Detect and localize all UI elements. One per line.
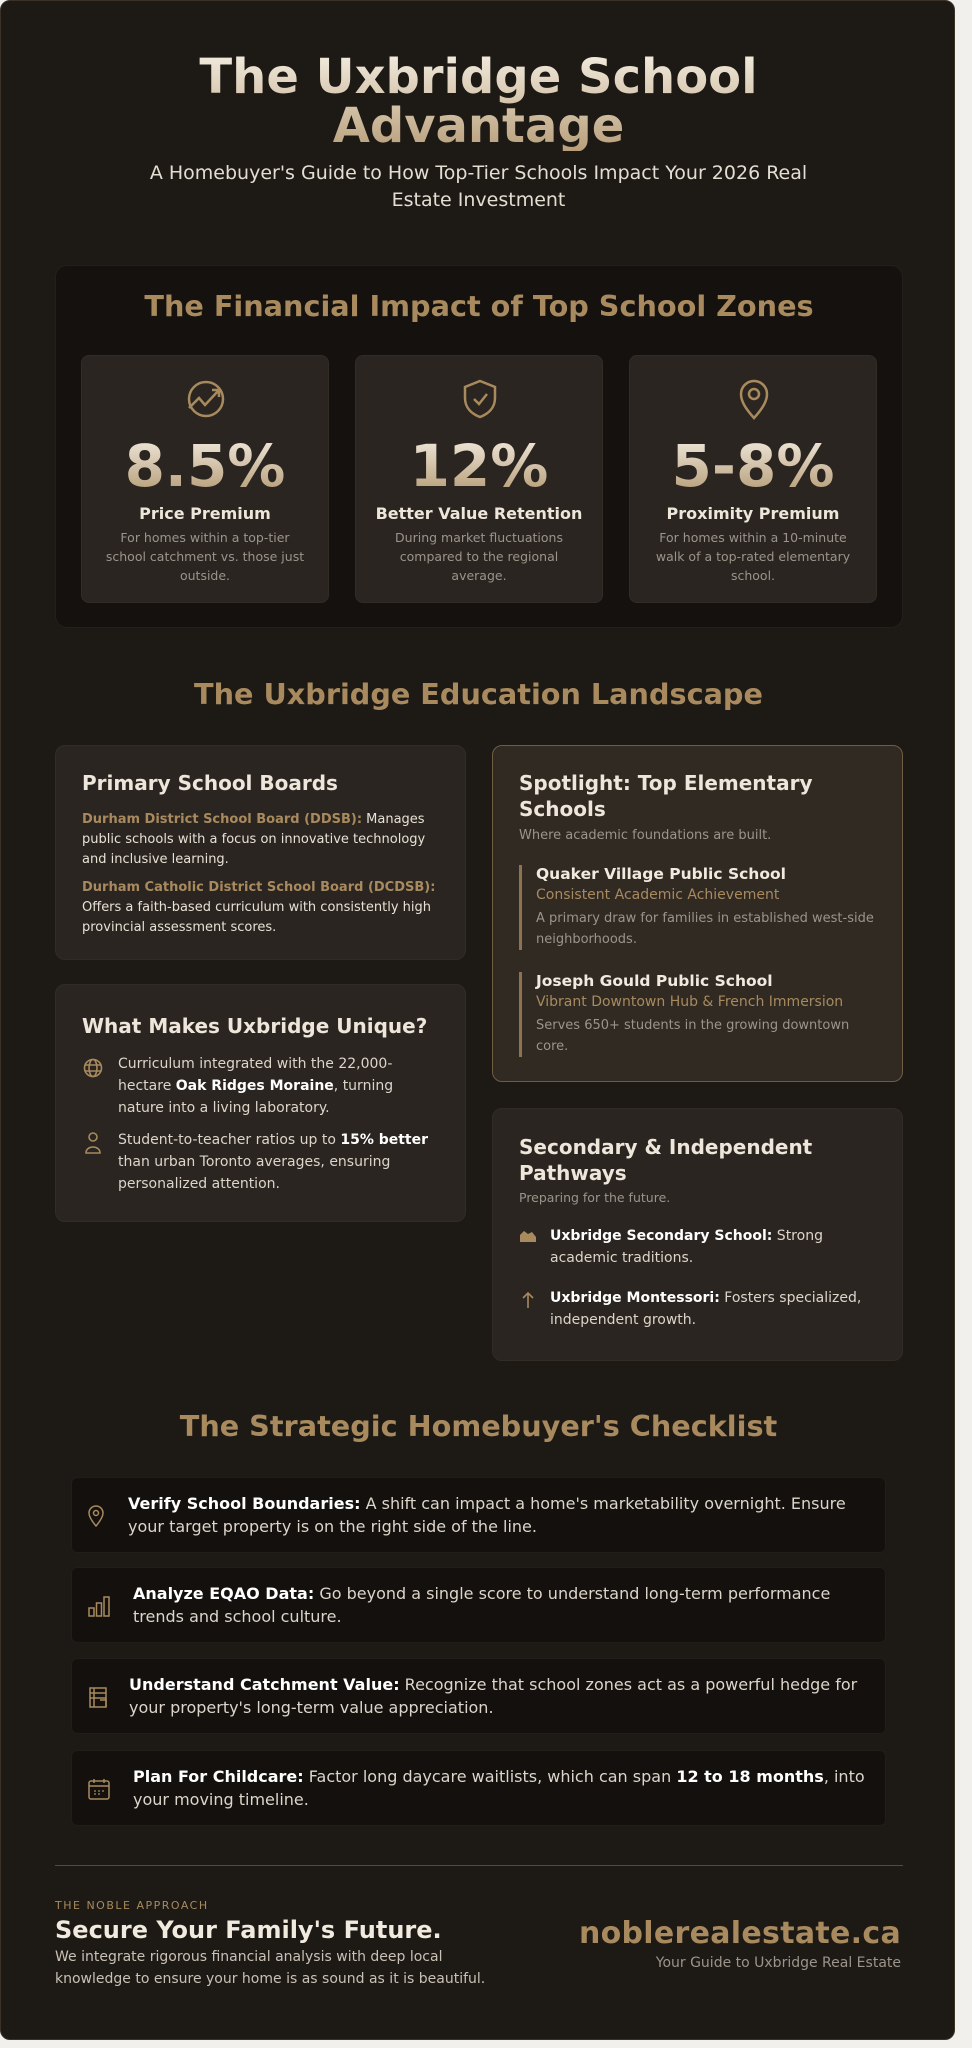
- icon: map pin: [740, 380, 768, 420]
- footer: left: THE NOBLE APPROACH: [55, 1899, 209, 1912]
- icon: trend circle: [188, 380, 224, 418]
- checklist item: boundaries: Verify School Boundaries: A shift can impact a home's marketability overnight. Ensure your target property is on the right side of the line.: [128, 1494, 846, 1536]
- footer: left: [54, 1899, 485, 1987]
- stat card: value retention: [355, 355, 603, 603]
- panel: spotlight elementary: [492, 745, 903, 1082]
- subtitle: Estate Investment: [392, 189, 565, 211]
- checklist item: EQAO: [71, 1567, 886, 1643]
- panel: spotlight elementary: Spotlight: Top Elementary Schools: [519, 771, 812, 821]
- heading: financial impact: The Financial Impact of Top School Zones: [144, 289, 814, 323]
- text: boards: Durham District School Board (DDSB): Manages public schools with a focus on innovative technology and inclusive learning.: [82, 812, 425, 867]
- school: joseph gould: Serves 650+ students in the growing downtown core.: [536, 1018, 849, 1054]
- panel: secondary pathways: [492, 1108, 903, 1361]
- item: montessori: Uxbridge Montessori: Fosters specialized, independent growth.: [550, 1290, 861, 1328]
- checklist item: catchment: [71, 1658, 886, 1734]
- stat card: price premium: For homes within a top-tier school catchment vs. those just outside.: [106, 530, 304, 583]
- school: joseph gould: Joseph Gould Public School: [536, 972, 773, 990]
- footer: brand: [579, 1916, 901, 1971]
- heading: education landscape: The Uxbridge Education Landscape: [194, 677, 763, 711]
- subtitle: [150, 162, 807, 211]
- checklist item: catchment: Understand Catchment Value: Recognize that school zones act as a powerful hedge for your property's long-term value appreciation.: [129, 1675, 857, 1717]
- stat card: proximity: For homes within a 10-minute walk of a top-rated elementary school.: [656, 530, 850, 583]
- checklist item: childcare: [71, 1750, 886, 1826]
- title: [1, 53, 956, 151]
- school: joseph gould: Vibrant Downtown Hub & French Immersion: [536, 994, 843, 1010]
- school: joseph gould: [519, 972, 880, 1057]
- stat card: price premium: Price Premium: [139, 504, 271, 523]
- footer: left: Secure Your Family's Future.: [55, 1916, 442, 1944]
- panel: spotlight elementary: Where academic foundations are built.: [519, 828, 771, 843]
- title: Advantage: [333, 98, 624, 154]
- stat card: value retention: Better Value Retention: [376, 504, 582, 523]
- panel: primary school boards: Durham Catholic District School Board (DCDSB): Offers a faith-based curriculum with consistently high provincial assessment scores.: [82, 880, 435, 935]
- school: quaker village: A primary draw for families in established west-side neighborhoods.: [536, 911, 874, 947]
- panel: what makes uxbridge unique: What Makes Uxbridge Unique?: [82, 1014, 427, 1038]
- school: quaker village: Consistent Academic Achievement: [536, 887, 779, 903]
- panel: what makes uxbridge unique: [55, 984, 466, 1222]
- stat card: value retention: 12%: [410, 432, 548, 500]
- stat card: price premium: 8.5%: [125, 432, 285, 500]
- stat card: proximity: Proximity Premium: [667, 504, 839, 523]
- school: quaker village: [519, 865, 880, 950]
- item: secondary school: Uxbridge Secondary School: Strong academic traditions.: [550, 1228, 823, 1266]
- item: ratios: Student-to-teacher ratios up to 15% better than urban Toronto averages, ensuring personalized attention.: [118, 1132, 428, 1192]
- checklist item: childcare: Plan For Childcare: Factor long daycare waitlists, which can span 12 to 18 months, into your moving timeline.: [133, 1767, 865, 1809]
- stat card: proximity: [629, 355, 877, 603]
- panel: primary school boards: [55, 745, 466, 960]
- stat card: price premium: [81, 355, 329, 603]
- panel: secondary pathways: Preparing for the future.: [519, 1190, 670, 1205]
- footer: brand: noblerealestate.ca: [579, 1916, 901, 1951]
- panel: secondary pathways: Secondary & Independent Pathways: [519, 1135, 812, 1185]
- stat card: proximity: 5-8%: [672, 432, 834, 500]
- panel: financial impact: [55, 265, 903, 628]
- subtitle: A Homebuyer's Guide to How Top-Tier Schools Impact Your 2026 Real: [150, 162, 807, 184]
- school: quaker village: Quaker Village Public School: [536, 865, 786, 883]
- stat card: value retention: During market fluctuations compared to the regional average.: [395, 530, 563, 583]
- item: moraine: Curriculum integrated with the 22,000-hectare Oak Ridges Moraine, turning nature into a living laboratory.: [118, 1056, 393, 1116]
- checklist item: boundaries: [71, 1477, 886, 1553]
- icon: shield: [464, 380, 496, 418]
- heading: checklist: The Strategic Homebuyer's Checklist: [180, 1409, 777, 1443]
- panel: primary school boards: Primary School Boards: [82, 771, 338, 795]
- title: The Uxbridge School: [199, 49, 758, 105]
- checklist item: EQAO: Analyze EQAO Data: Go beyond a single score to understand long-term performance trends and school culture.: [133, 1584, 830, 1626]
- footer: brand: Your Guide to Uxbridge Real Estate: [656, 1955, 901, 1971]
- footer: left: We integrate rigorous financial analysis with deep local knowledge to ensure your home is as sound as it is beautiful.: [55, 1949, 485, 1987]
